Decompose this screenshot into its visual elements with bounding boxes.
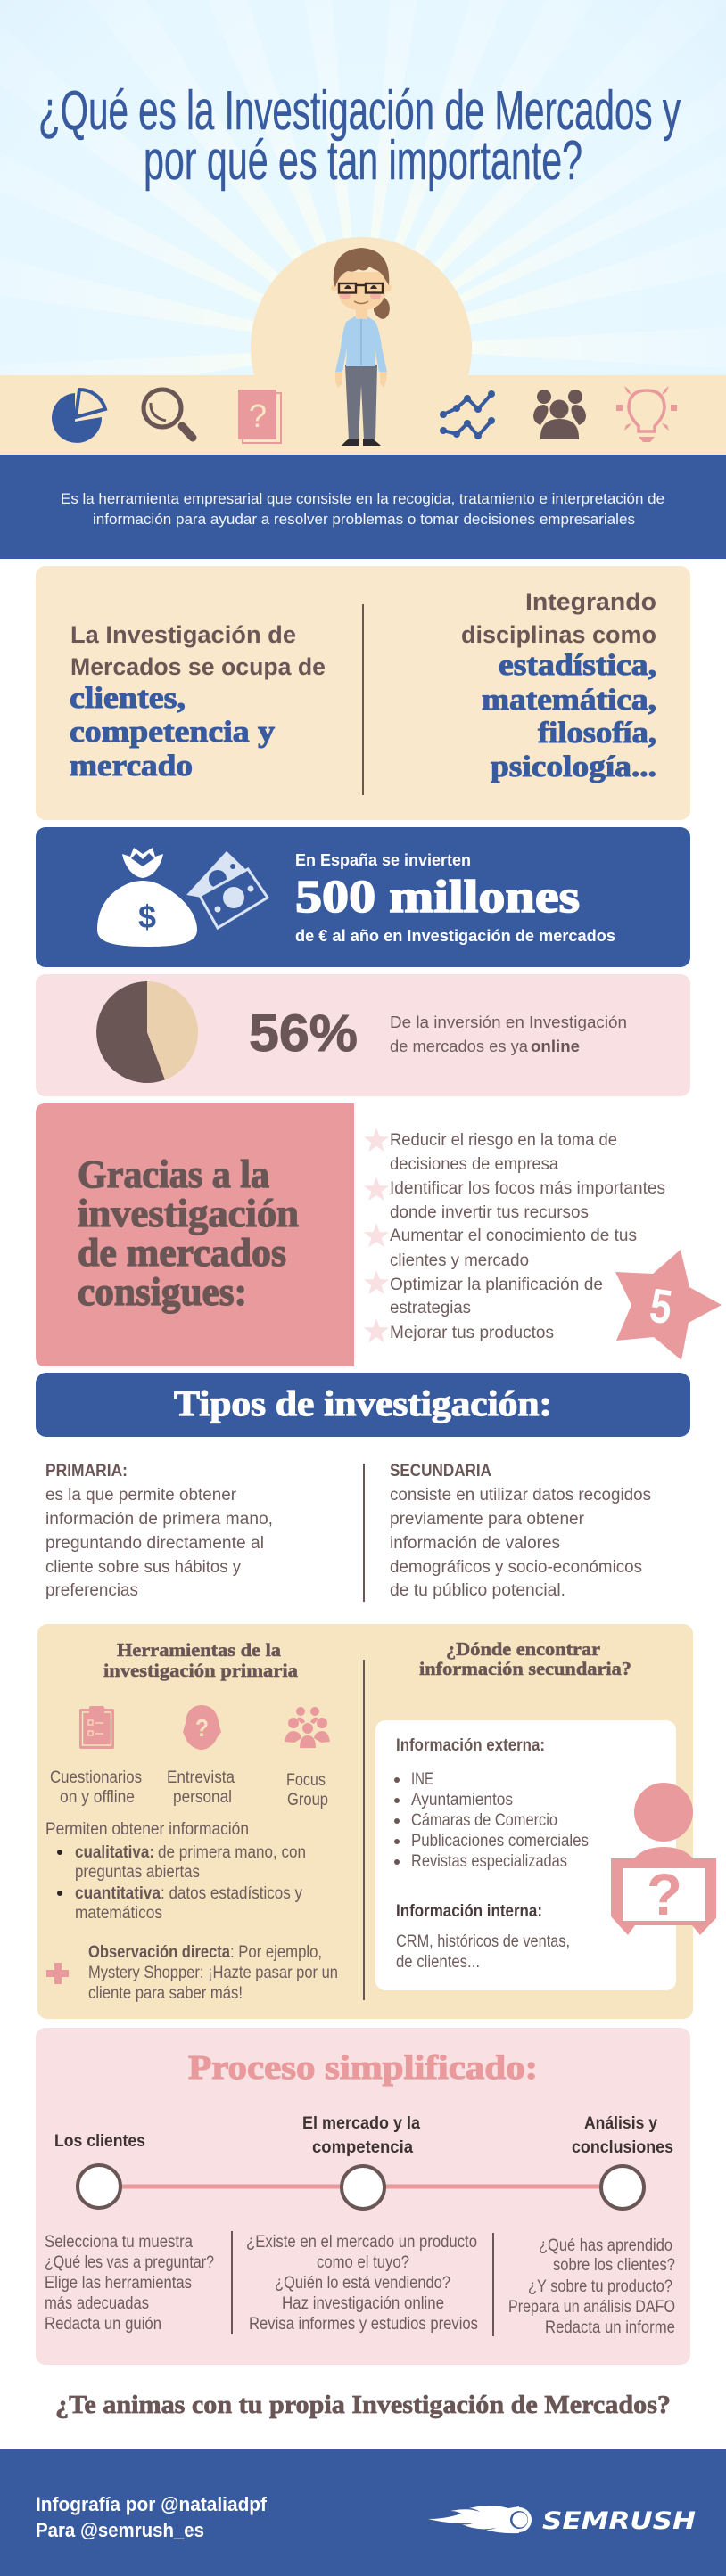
column: análisis: Redacta un informe [545, 2318, 675, 2337]
tool labels: on y offline [60, 1788, 135, 1807]
column: los clientes: ¿Qué les vas a preguntar? [45, 2253, 214, 2272]
right statement: estadística, [499, 649, 656, 682]
shirt [335, 316, 387, 372]
text block: direct observation: Observación directa [88, 1943, 230, 1962]
list of five benefits: clientes y mercado [390, 1251, 529, 1270]
tool labels: personal [173, 1788, 232, 1807]
illustration: woman with glasses [331, 248, 392, 446]
stat text: En España se invierten [295, 851, 471, 869]
text block: information types: matemáticos [75, 1904, 162, 1923]
left statement: La Investigación de [70, 621, 296, 648]
footer [0, 2449, 726, 2576]
column: los clientes: Elige las herramientas [45, 2274, 192, 2293]
stat description [390, 1013, 627, 1055]
icon: magnifying glass [144, 390, 193, 438]
stat text: 500 millones [295, 872, 580, 923]
step labels: competencia [312, 2138, 413, 2157]
credits [36, 2493, 268, 2541]
intro band: Es la herramienta empresarial que consiste en la recogida, tratamiento e interpretación de [61, 490, 664, 507]
list of five benefits [364, 1128, 665, 1342]
card: information sources: Información interna: [396, 1902, 542, 1921]
text block: secundaria [390, 1462, 651, 1600]
list of five benefits: Reducir el riesgo en la toma de [390, 1131, 617, 1150]
stat description: De la inversión en Investigación [390, 1013, 627, 1031]
column: el mercado: ¿Existe en el mercado un producto [246, 2233, 477, 2252]
heading: tipos de investigación: Tipos de investigación: [174, 1383, 552, 1423]
hands [335, 371, 387, 388]
stat text [295, 851, 615, 945]
closing question: ¿Te animas con tu propia Investigación de Mercados? [55, 2391, 671, 2419]
tool labels: Group [287, 1791, 328, 1809]
panel: 56% online [36, 974, 690, 1096]
right statement: disciplinas como [461, 621, 656, 648]
tool labels [50, 1768, 328, 1809]
icon: light bulb [616, 386, 677, 442]
heading: dónde encontrar: información secundaria? [419, 1658, 631, 1679]
list of five benefits: Optimizar la planificación de [390, 1276, 603, 1294]
eyes [344, 285, 377, 289]
step labels: Análisis y [584, 2114, 657, 2133]
text block: information types: de primera mano, con [158, 1843, 306, 1862]
cheeks [340, 292, 351, 299]
heading: herramientas: Herramientas de la [117, 1639, 282, 1661]
neck [356, 301, 367, 319]
icon: money bag [97, 848, 197, 947]
panel: tools and sources [37, 1624, 716, 2019]
tool labels: Focus [286, 1771, 326, 1790]
heading: herramientas [103, 1639, 299, 1681]
glasses [339, 283, 383, 292]
left statement: mercado [70, 750, 193, 783]
left statement [70, 621, 326, 783]
hair [334, 248, 389, 287]
panel: gracias a la investigación: investigación [78, 1192, 299, 1235]
icon: money bag: $ [138, 898, 156, 935]
card: information sources: Información externa: [396, 1736, 545, 1755]
panel: gracias a la investigación: de mercados [78, 1231, 286, 1275]
column: los clientes: Selecciona tu muestra [45, 2233, 193, 2252]
heading: tipos de investigación [36, 1373, 690, 1437]
icon: trend lines [440, 390, 495, 439]
logo: semrush [428, 2506, 696, 2535]
card: information sources: de clientes... [396, 1953, 480, 1972]
column: el mercado: Revisa informes y estudios previos [249, 2315, 478, 2334]
text block: information types [45, 1820, 306, 1923]
logo: semrush: SEMRUSH [542, 2507, 696, 2535]
list of five benefits: donde invertir tus recursos [390, 1203, 589, 1222]
column: análisis: ¿Qué has aprendido [539, 2236, 672, 2255]
stat text: de € al año en Investigación de mercados [295, 927, 615, 945]
text block: direct observation: Mystery Shopper: ¡Hazte pasar por un [88, 1964, 338, 1982]
right statement: matemática, [482, 684, 656, 717]
icon: clipboard [79, 1706, 114, 1749]
column: análisis [508, 2236, 675, 2337]
icon: focus group [285, 1707, 330, 1748]
card: information sources: Cámaras de Comercio [411, 1811, 557, 1830]
icon: question head [183, 1705, 221, 1750]
step labels [54, 2114, 673, 2157]
badge: star with number 5: 5 [647, 1279, 675, 1334]
list of five benefits: Identificar los focos más importantes [390, 1179, 665, 1198]
text block: secundaria: previamente para obtener [390, 1510, 585, 1529]
card: information sources: Ayuntamientos [411, 1791, 513, 1809]
column: análisis: sobre los clientes? [553, 2256, 675, 2275]
text block: primaria [45, 1462, 273, 1600]
heading: dónde encontrar [419, 1638, 631, 1679]
badge: star with number 5 [615, 1250, 722, 1360]
heading: dónde encontrar: ¿Dónde encontrar [446, 1638, 600, 1660]
text block: direct observation [88, 1943, 338, 2003]
step labels: conclusiones [572, 2138, 673, 2157]
text block: primaria: es la que permite obtener [45, 1486, 237, 1505]
pie chart 56 percent [96, 981, 198, 1083]
text block: secundaria: consiste en utilizar datos recogidos [390, 1486, 651, 1505]
card: information sources [375, 1720, 676, 1990]
timeline [78, 2165, 644, 2209]
title [38, 80, 681, 192]
panel: 500 millones [36, 827, 690, 967]
left statement: clientes, [70, 682, 186, 715]
panel: proceso simplificado [36, 2028, 690, 2365]
text block: primaria: preguntando directamente al [45, 1534, 264, 1553]
column: análisis: ¿Y sobre tu producto? [528, 2277, 672, 2296]
tool labels: Cuestionarios [50, 1768, 142, 1787]
right statement: Integrando [525, 588, 656, 615]
text block: information types: preguntas abiertas [75, 1863, 200, 1882]
card: information sources: INE [411, 1770, 433, 1789]
text block: primaria: cliente sobre sus hábitos y [45, 1558, 241, 1577]
heading: herramientas: investigación primaria [103, 1660, 299, 1681]
card: information sources: Publicaciones comerciales [411, 1832, 589, 1850]
text block: secundaria: demográficos y socio-económicos [390, 1558, 642, 1577]
panel: gracias a la investigación: Gracias a la [78, 1153, 269, 1196]
step labels: Los clientes [54, 2132, 145, 2151]
column: los clientes: Redacta un guión [45, 2315, 161, 2334]
text block: information types: : datos estadísticos y [161, 1884, 302, 1903]
right statement [461, 588, 656, 783]
text block: primaria: PRIMARIA: [45, 1462, 128, 1481]
text block: information types: cuantitativa [75, 1884, 161, 1903]
intro band: información para ayudar a resolver problemas o tomar decisiones empresariales [93, 511, 635, 528]
tool labels: Entrevista [167, 1768, 235, 1787]
panel: what it covers [36, 566, 690, 820]
intro band [0, 455, 726, 559]
list of five benefits: decisiones de empresa [390, 1155, 558, 1174]
column: análisis: Prepara un análisis DAFO [508, 2298, 675, 2317]
right statement: psicología... [491, 751, 656, 783]
text block: information types: Permiten obtener información [45, 1820, 249, 1839]
column: el mercado [246, 2233, 478, 2334]
list of five benefits: Mejorar tus productos [390, 1324, 554, 1342]
legs [345, 365, 377, 440]
stat description: de mercados es ya [390, 1038, 529, 1055]
text block: direct observation: cliente para saber más! [88, 1984, 243, 2003]
column: el mercado: ¿Quién lo está vendiendo? [275, 2274, 450, 2293]
heading: Proceso simplificado: [188, 2049, 538, 2087]
shoes [342, 439, 381, 446]
card: information sources: CRM, históricos de ventas, [396, 1932, 570, 1951]
text block: information types: cualitativa: [75, 1843, 154, 1862]
card: information sources: Revistas especializadas [411, 1852, 567, 1871]
icon: person with question sign: ? [647, 1861, 682, 1927]
column: los clientes [45, 2233, 214, 2334]
left statement: Mercados se ocupa de [70, 653, 326, 680]
text block: secundaria: información de valores [390, 1534, 560, 1553]
text block: direct observation: : Por ejemplo, [230, 1943, 322, 1962]
column: los clientes: más adecuadas [45, 2294, 149, 2313]
list of five benefits: Aumentar el conocimiento de tus [390, 1226, 637, 1245]
smile [354, 301, 368, 303]
panel: 56% online: 56% [249, 1005, 358, 1062]
sun dome and beige band [0, 237, 726, 458]
hero background with sun rays [0, 0, 726, 462]
credits: Infografía por @nataliadpf [36, 2493, 268, 2515]
column: el mercado: como el tuyo? [317, 2253, 409, 2272]
face [337, 272, 386, 310]
icon: person with question sign [611, 1783, 716, 1935]
panel: gracias a la investigación: consigues: [78, 1270, 247, 1314]
icon: question head: ? [195, 1714, 209, 1742]
icon: banknotes [189, 853, 268, 928]
ponytail [374, 294, 390, 319]
text block: secundaria: de tu público potencial. [390, 1581, 565, 1600]
column: el mercado: Haz investigación online [282, 2294, 444, 2313]
icon: pie chart [52, 390, 105, 443]
icon: question book: ? [249, 398, 267, 434]
panel: gracias a la investigación [36, 1103, 354, 1366]
icon: question book [238, 390, 281, 443]
list of five benefits: estrategias [390, 1299, 471, 1317]
right statement: filosofía, [538, 717, 656, 750]
text block: primaria: preferencias [45, 1581, 138, 1600]
icon: group of people [533, 390, 586, 439]
left statement: competencia y [70, 716, 275, 749]
text block: primaria: información de primera mano, [45, 1510, 273, 1529]
step labels: El mercado y la [302, 2114, 420, 2133]
icon: plus [46, 1963, 69, 1984]
text block: secundaria: SECUNDARIA [390, 1462, 491, 1481]
credits: Para @semrush_es [36, 2519, 204, 2541]
stat description: online [531, 1038, 580, 1055]
